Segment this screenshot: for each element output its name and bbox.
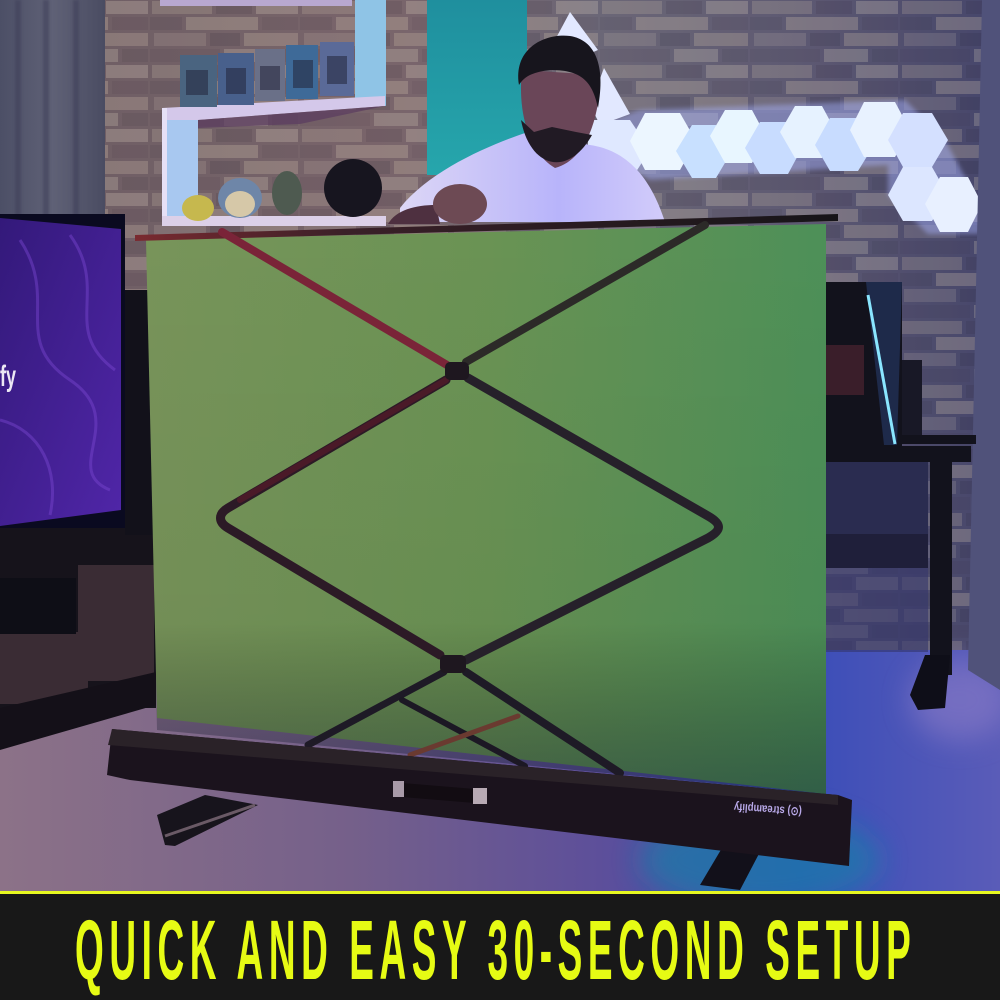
psyduck figure: [182, 195, 214, 221]
white wall shelf with collectibles: [160, 0, 386, 226]
green screen panel: [146, 224, 826, 794]
base feet: [157, 795, 762, 890]
floor: [0, 650, 1000, 910]
top bar of screen: [135, 214, 838, 241]
TV on left: [0, 214, 125, 530]
teal lit wall: [427, 0, 527, 175]
hexagon light panels: [555, 12, 982, 234]
right curtain: [968, 0, 1000, 690]
case handle: [393, 781, 487, 804]
right desk with PC tower: [826, 282, 976, 710]
TV screen partial text: fy: [0, 361, 16, 393]
gas mask: [324, 159, 382, 217]
snorlax figure: [218, 178, 262, 218]
amiibo boxes: [180, 42, 354, 107]
screen case base: [107, 729, 852, 866]
dark media console: [0, 290, 156, 750]
hulk figure: [272, 171, 302, 215]
man in white t-shirt: [388, 36, 665, 224]
caption text: QUICK AND EASY 30-SECOND SETUP: [75, 903, 911, 997]
case brand logo: (⊙) streamplify: [733, 800, 802, 819]
scissor mechanism arms: [220, 225, 718, 773]
curtain left: [0, 0, 105, 225]
bottom caption banner: [0, 891, 1000, 1000]
